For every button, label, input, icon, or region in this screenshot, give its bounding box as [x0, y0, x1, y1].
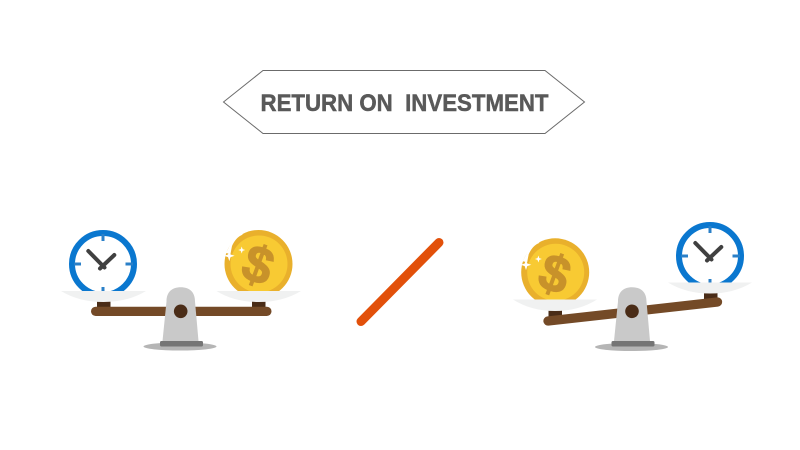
- left pan: [61, 291, 146, 302]
- stand: [614, 287, 650, 341]
- beam: [548, 302, 718, 321]
- pan feet: [548, 292, 718, 317]
- icon: coin: [521, 238, 590, 300]
- shadow: [595, 343, 668, 351]
- icon: clock: [679, 225, 741, 287]
- icon: coin: $: [531, 242, 578, 307]
- right pan: [668, 282, 752, 294]
- title banner: [224, 70, 584, 134]
- left pan: [513, 300, 597, 311]
- pivot: [174, 304, 188, 318]
- stand: [162, 287, 198, 341]
- beam: [91, 307, 272, 316]
- pan feet: [97, 301, 266, 307]
- icon: coin: $: [234, 233, 281, 298]
- icon: clock: [72, 233, 134, 295]
- tilted scale (right): [513, 225, 752, 351]
- title text: RETURN ON INVESTMENT: [260, 90, 549, 117]
- pivot: [625, 304, 639, 318]
- shadow: [144, 342, 216, 350]
- stand base: [160, 341, 203, 346]
- icon: coin: [224, 230, 292, 291]
- infographic canvas: [62, 70, 752, 351]
- stand base: [612, 341, 654, 346]
- right pan: [216, 291, 301, 302]
- banner hexagon outline: [224, 70, 584, 134]
- balanced scale (left): [61, 230, 301, 350]
- slash divider: [361, 242, 439, 322]
